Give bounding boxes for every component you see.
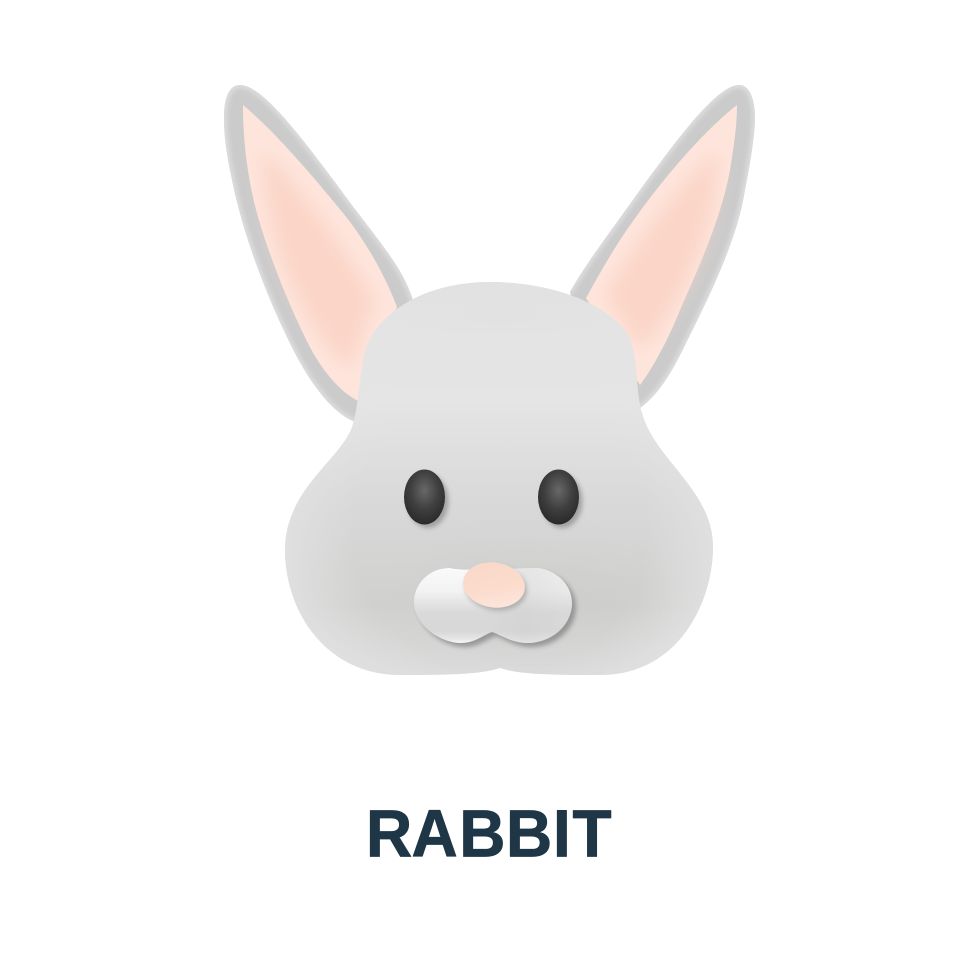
title: RABBIT xyxy=(366,796,612,871)
muzzle xyxy=(414,568,576,647)
head xyxy=(280,280,720,680)
right eye xyxy=(538,470,582,528)
right ear xyxy=(570,85,755,408)
left ear xyxy=(224,85,413,422)
icon: rabbit head xyxy=(215,80,770,680)
nose xyxy=(460,558,530,615)
left eye xyxy=(404,470,448,528)
